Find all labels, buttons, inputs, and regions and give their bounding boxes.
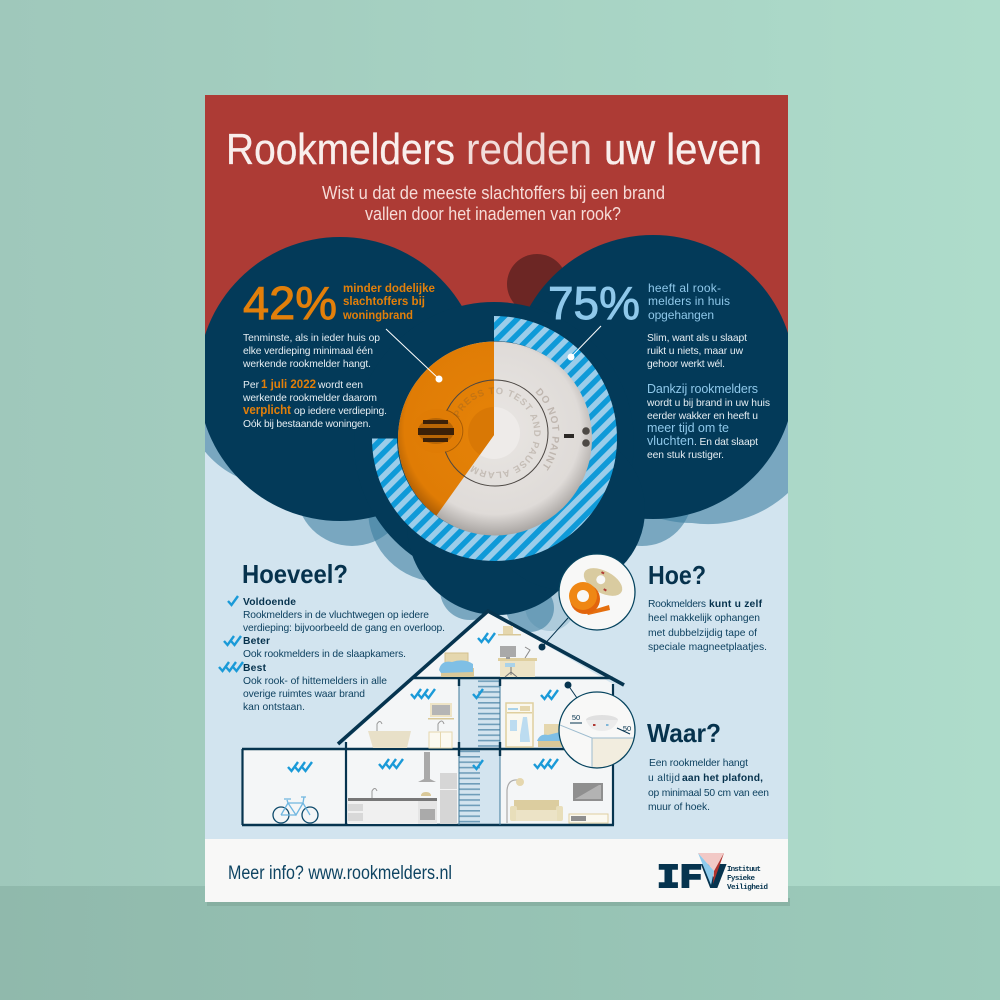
callout ring (559, 692, 635, 768)
fridge (440, 773, 457, 824)
attic checks (478, 633, 495, 642)
pointer line 42 percent (386, 329, 442, 382)
logo letters: IFV (657, 860, 725, 897)
floor (0, 886, 1000, 1000)
title (226, 125, 762, 174)
text block right: wordt u bij brand in uw huis (646, 398, 770, 409)
stair checks (473, 689, 483, 769)
title: uw leven (604, 125, 762, 174)
stat label: slachtoffers bij (343, 294, 425, 308)
sofa (510, 800, 563, 821)
tape roll (569, 582, 610, 615)
stat 42 percent (243, 277, 435, 329)
bath tap (377, 722, 382, 731)
subtitle (322, 182, 665, 224)
heading Waar: Waar? (647, 718, 721, 748)
list text: Rookmelders in de vluchtwegen op iedere (243, 610, 429, 621)
text block left: werkende rookmelder hangt. (242, 359, 371, 370)
footer link: Meer info? www.rookmelders.nl (228, 863, 452, 884)
text Hoe: heel makkelijk ophangen (648, 613, 760, 624)
list text: verdieping: bijvoorbeeld de gang en overloop. (243, 623, 445, 634)
dimension right: 50 (623, 724, 631, 733)
extractor hood (418, 752, 436, 782)
poster light blue field (205, 420, 788, 839)
logo text: Veiligheid (727, 884, 768, 892)
poster top red (205, 95, 788, 335)
indicator dash (564, 434, 574, 438)
orange 42 percent wedge (398, 342, 494, 516)
house structure lines (242, 611, 624, 825)
stat label: heeft al rook- (648, 281, 721, 295)
text block right: vluchten (647, 434, 694, 448)
text block left: verplicht (243, 403, 292, 417)
list text: kan ontstaan. (243, 702, 305, 713)
callout: tape (538, 554, 635, 650)
text block left: werkende rookmelder daarom (242, 393, 377, 404)
stat label: woningbrand (342, 308, 413, 322)
text Waar: Een rookmelder hangt (649, 758, 748, 769)
stat label: opgehangen (648, 308, 714, 322)
tv cabinet (569, 814, 608, 823)
callout circle (559, 554, 635, 630)
centre hub (480, 407, 520, 459)
text Hoe: met dubbelzijdig tape of (648, 628, 757, 639)
attic room (439, 626, 537, 677)
stat number: 75% (548, 277, 640, 329)
pointer line 75 percent (568, 326, 601, 360)
text Waar: muur of hoek. (648, 802, 710, 813)
list text: Ook rook- of hittemelders in alle (243, 676, 387, 687)
television (573, 783, 603, 801)
living room (507, 759, 608, 823)
house interior (242, 611, 613, 825)
cabinets (348, 801, 418, 824)
check two (224, 636, 241, 645)
smoke clouds light (205, 421, 788, 632)
bedroom checks (541, 690, 558, 699)
heading Hoeveel: Hoeveel? (242, 559, 348, 589)
test button ring (442, 380, 548, 486)
text Hoe: Rookmelders (648, 599, 706, 610)
list text: Ook rookmelders in de slaapkamers. (243, 649, 406, 660)
text block left: Tenminste, als in ieder huis op (243, 333, 380, 344)
stat number: 42% (243, 277, 337, 329)
logo text (727, 866, 768, 892)
title: Rookmelders (226, 125, 455, 174)
text block left: Oók bij bestaande woningen. (243, 419, 371, 430)
text block right: . En dat slaapt (694, 437, 758, 448)
text block right: Slim, want als u slaapt (647, 333, 747, 344)
list text: Beter (243, 636, 270, 647)
list text: overige ruimtes waar brand (243, 689, 365, 700)
magnet plate (579, 562, 627, 602)
callout: placement (558, 682, 636, 769)
house cross-section (242, 611, 624, 825)
smoke puff dark red (507, 254, 562, 306)
IFV logo (657, 853, 768, 897)
text block left: elke verdieping minimaal één (243, 346, 373, 357)
bike room (273, 762, 318, 823)
lower stairwell (459, 750, 500, 824)
counter (348, 798, 437, 801)
list text (243, 597, 445, 713)
attic desk (498, 646, 537, 677)
check three (219, 662, 243, 671)
logo text: Fysieke (727, 875, 755, 883)
text block left: 1 juli 2022 (261, 377, 316, 391)
bicycle (273, 797, 318, 823)
text block right: gehoor werkt wél. (647, 359, 725, 370)
do not paint label: DO NOT PAINT (536, 388, 560, 471)
stat label: minder dodelijke (343, 281, 435, 295)
callout line (538, 618, 568, 650)
heading Hoe: Hoe? (648, 560, 706, 590)
storage checks (288, 762, 312, 771)
text Hoe (648, 599, 767, 653)
text Waar: aan het plafond, (682, 773, 763, 784)
list Hoeveel (219, 596, 445, 713)
text block right: ruikt u niets, maar uw (647, 346, 744, 357)
stat 75 percent (548, 277, 730, 329)
sink cabinet (429, 721, 452, 748)
poster (205, 95, 788, 902)
subtitle: Wist u dat de meeste slachtoffers bij een brand (322, 182, 665, 203)
logo triangle (698, 853, 724, 885)
kitchen checks (379, 759, 403, 768)
bathroom checks (411, 689, 435, 698)
ceiling detector (586, 715, 618, 731)
bedroom bed (537, 724, 562, 747)
text block left (242, 333, 387, 430)
text block right: meer tijd om te (647, 421, 729, 435)
stat label: melders in huis (648, 294, 730, 308)
dimension left: 50 (572, 713, 580, 722)
text block right: een stuk rustiger. (647, 450, 724, 461)
text Waar: u altijd (648, 773, 680, 784)
smoke detector photo (398, 342, 592, 536)
check one (228, 596, 238, 605)
kitchen tap (372, 788, 377, 798)
attic shelf (498, 626, 521, 636)
stat label (342, 281, 435, 322)
logo text: Instituut (727, 866, 761, 874)
embossed label: PRESS TO TEST AND PAUSE ALARM (453, 387, 541, 478)
wardrobe (506, 703, 533, 747)
text Waar: op minimaal 50 cm van een (648, 788, 769, 799)
text block left: Per (243, 380, 260, 391)
text block right: Dankzij rookmelders (647, 382, 758, 396)
text Hoe: speciale magneetplaatjes. (648, 642, 767, 653)
mirror (428, 703, 454, 720)
living room checks (534, 759, 558, 768)
text block right: eerder wakker en heeft u (647, 411, 758, 422)
detector body (398, 342, 592, 536)
list text: Best (243, 663, 267, 674)
text block right (646, 333, 770, 461)
callout line (564, 682, 577, 698)
upper stairwell (459, 679, 500, 749)
poster shadow (207, 898, 790, 906)
ceiling corner (560, 724, 634, 768)
kitchen (348, 752, 457, 824)
text block left: op iedere verdieping. (294, 406, 387, 417)
sounder holes (582, 427, 590, 447)
text Hoe: kunt u zelf (709, 599, 763, 610)
list text: Voldoende (243, 597, 296, 608)
striped 75 percent ring (372, 316, 617, 561)
stat label (648, 281, 730, 322)
bathroom (368, 689, 454, 748)
vent slots (418, 410, 464, 452)
text block left: wordt een (317, 380, 363, 391)
floor lamp (507, 778, 524, 823)
bath (368, 731, 411, 748)
title: redden (466, 125, 592, 174)
attic bed (439, 653, 474, 677)
callout circle (559, 692, 635, 768)
stove (418, 792, 437, 824)
footer band (205, 839, 788, 902)
bedroom (506, 690, 562, 747)
text Waar (648, 758, 769, 813)
subtitle: vallen door het inademen van rook? (365, 203, 621, 224)
navy smoke cloud (198, 235, 795, 615)
